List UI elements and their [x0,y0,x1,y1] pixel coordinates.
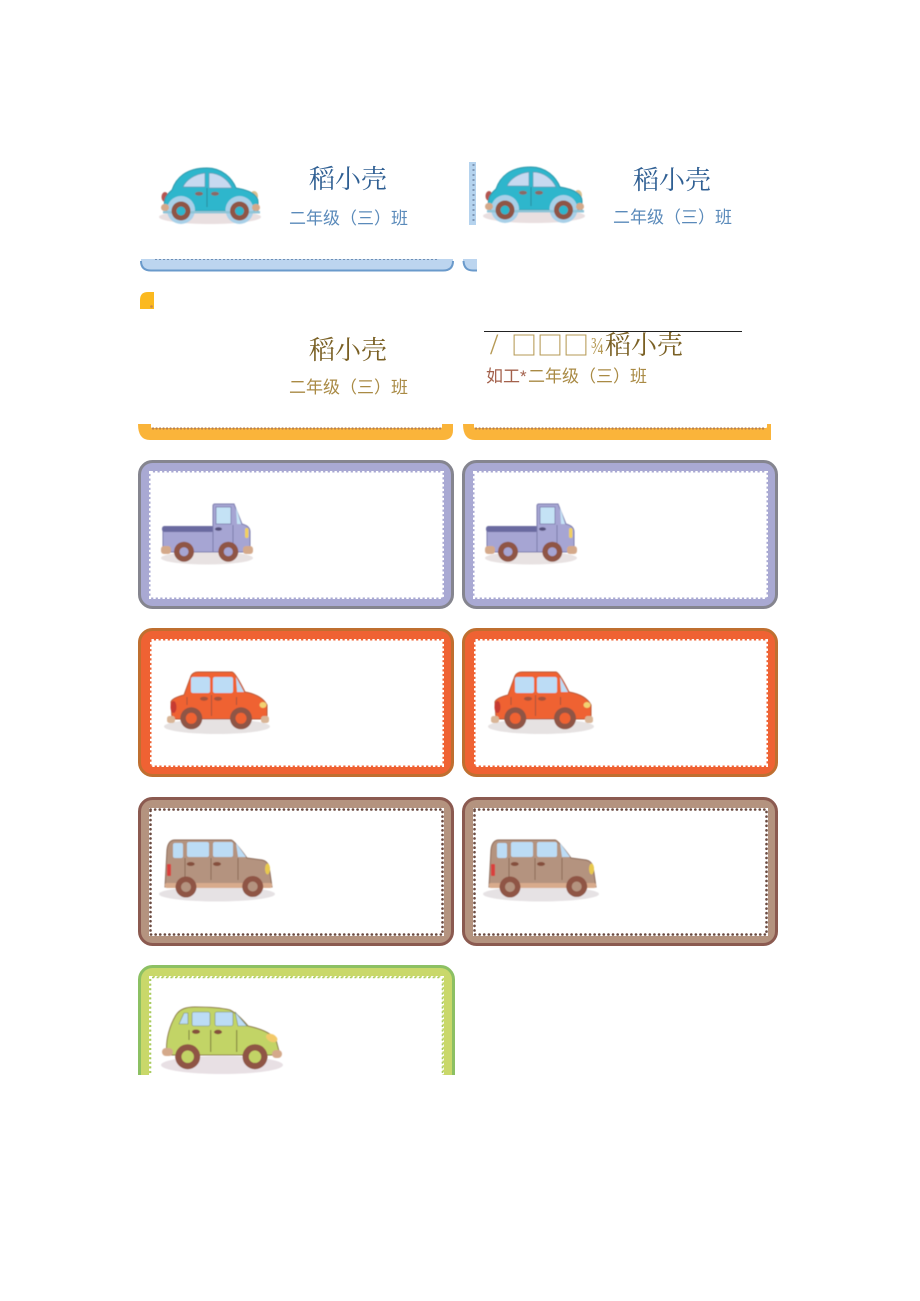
purple label, right [464,462,776,608]
garbled name line: □□□ [511,326,589,363]
icon: red car [164,672,270,734]
blue name label, left [141,165,453,271]
garbled class line: 二年级（三）班 [528,367,647,386]
garbled name line: ¾ [591,334,604,360]
icon: brown van [159,840,275,902]
class: 二年级（三）班 [613,208,732,227]
name: 稻小壳 [309,336,387,365]
brown label, right [464,798,776,944]
icon: red car [488,672,594,734]
name: 稻小壳 [633,166,711,195]
blue name label, right [463,162,732,271]
class: 二年级（三）班 [289,209,408,228]
yellow frame corner [140,292,154,309]
icon: pickup truck [161,504,253,564]
garbled name line [490,326,683,363]
name: 稻小壳 [309,165,387,194]
garbled name line: 稻小壳 [605,331,683,360]
class: 二年级（三）班 [289,378,408,397]
garbled name line: / [490,328,499,361]
garbled class line: 如工* [486,367,527,386]
bottom edge of blue frame [141,259,453,271]
red label, left [140,630,452,776]
red label, right [464,630,776,776]
icon: blue car [483,167,585,223]
yellow name label, right with garbled text [463,326,771,440]
green label, cropped [138,965,455,1075]
bottom corner of blue frame [463,259,477,271]
purple label, left [140,462,452,608]
yellow name label, left [138,292,453,440]
rule line [484,331,742,332]
left edge of blue frame [469,162,476,225]
icon: blue car [159,168,261,224]
icon: green car [161,1007,283,1074]
icon: pickup truck [485,504,577,564]
bottom edge of yellow frame [463,424,771,440]
bottom edge of yellow frame [138,424,453,440]
brown label, left [140,798,452,944]
icon: brown van [483,840,599,902]
